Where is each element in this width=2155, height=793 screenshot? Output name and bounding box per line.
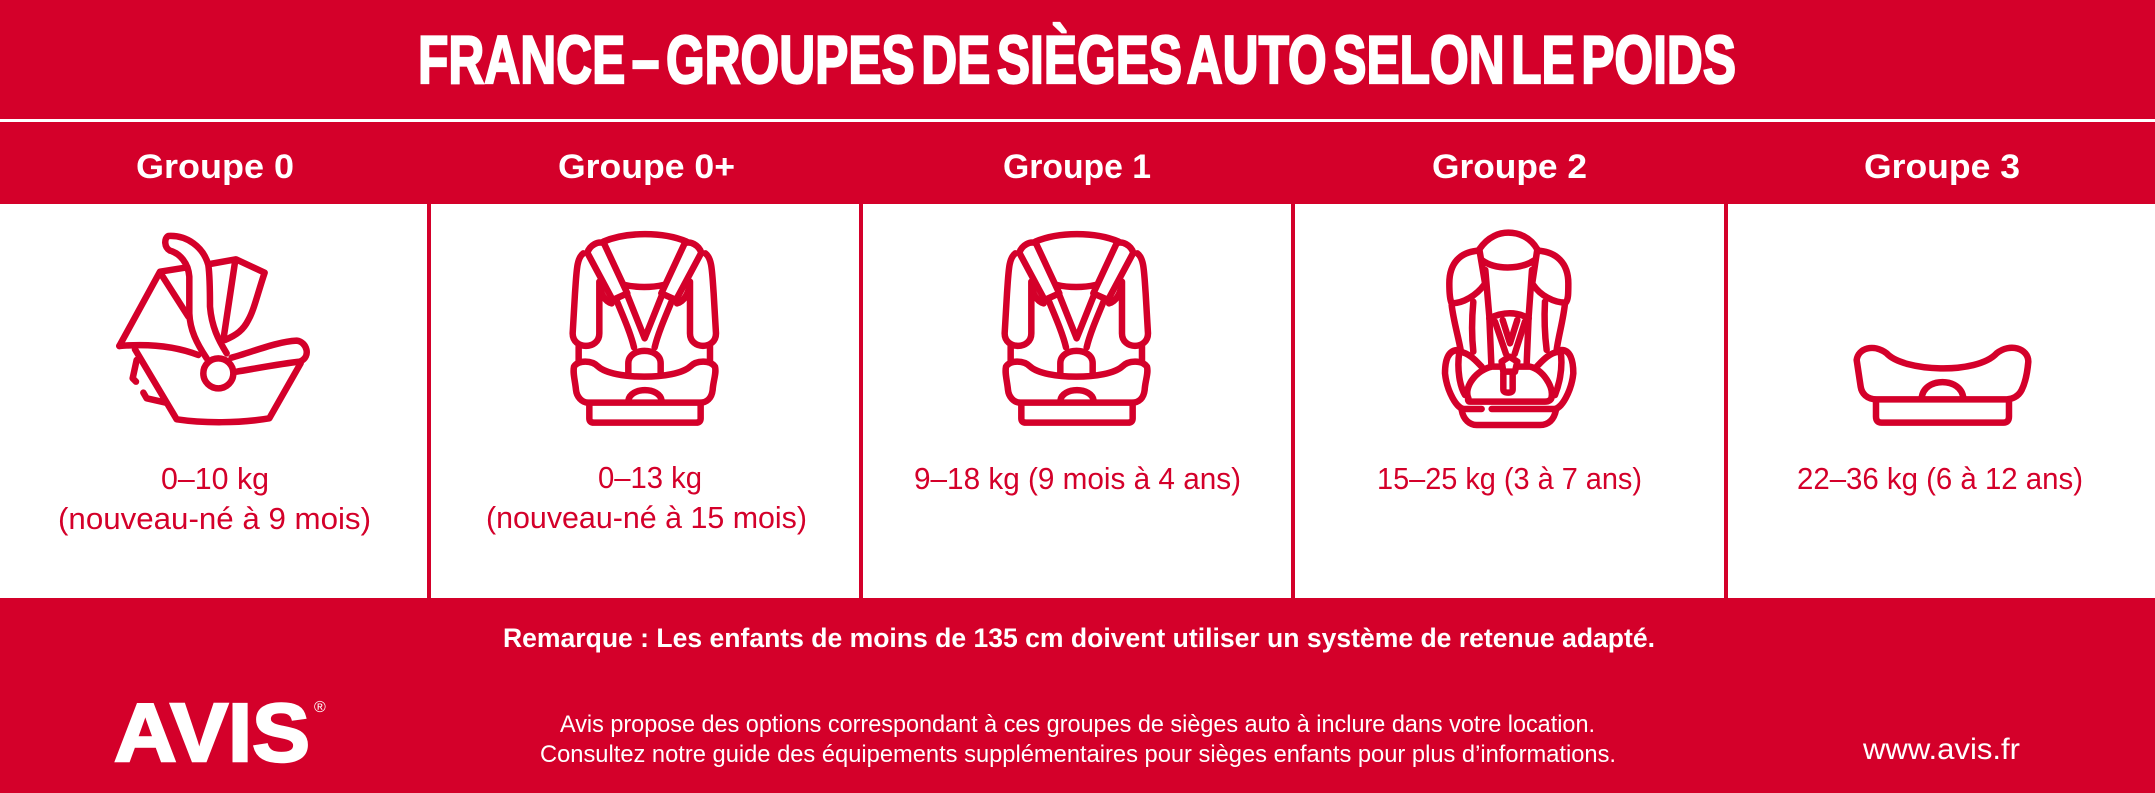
label: Groupe 0+ weight: [486, 460, 807, 535]
icon: harness seat: [573, 234, 716, 423]
label: Groupe 1 weight: 9–18 kg (9 mois à 4 ans): [914, 461, 1241, 496]
label: Groupe 0 weight: [58, 461, 371, 536]
remark: Remarque : Les enfants de moins de 135 cm doivent utiliser un système de retenue adapté.: [503, 623, 1655, 653]
label: Groupe 0 weight: (nouveau-né à 9 mois): [58, 501, 371, 536]
label: Groupe 2 weight: 15–25 kg (3 à 7 ans): [1377, 461, 1642, 496]
panel: Groupe 1: [863, 148, 1291, 598]
icon: booster cushion: [1857, 348, 2028, 423]
icon: infant carrier: [119, 236, 307, 422]
label: Groupe 0+ weight: 0–13 kg: [598, 460, 702, 495]
icon: padded booster seat: [1445, 233, 1573, 425]
logo: AVIS: ®: [314, 699, 326, 716]
logo: AVIS: AVIS: [114, 686, 310, 779]
footer text: Consultez notre guide des équipements supplémentaires pour sièges enfants pour plus d’informations.: [540, 741, 1616, 768]
heading: Groupe 0: Groupe 0: [136, 148, 294, 186]
label: Groupe 3 weight: 22–36 kg (6 à 12 ans): [1797, 461, 2083, 496]
website: www.avis.fr: [1862, 733, 2020, 766]
footer text: [540, 711, 1616, 768]
heading: Groupe 1: Groupe 1: [1003, 148, 1151, 186]
heading: Groupe 0+: Groupe 0+: [558, 148, 735, 186]
panel: Groupe 0: [0, 148, 427, 598]
label: Groupe 0+ weight: (nouveau-né à 15 mois): [486, 500, 807, 535]
panel: Groupe 2: [1295, 148, 1724, 598]
footer text: Avis propose des options correspondant à ces groupes de sièges auto à inclure dans votre location.: [560, 711, 1595, 738]
heading: Groupe 3: Groupe 3: [1864, 148, 2020, 186]
panel: Groupe 0+: [431, 148, 859, 598]
panel: Groupe 3: [1728, 148, 2155, 598]
heading: Groupe 2: Groupe 2: [1432, 148, 1587, 186]
label: Groupe 0 weight: 0–10 kg: [161, 461, 269, 496]
icon: harness seat: [1005, 234, 1148, 423]
